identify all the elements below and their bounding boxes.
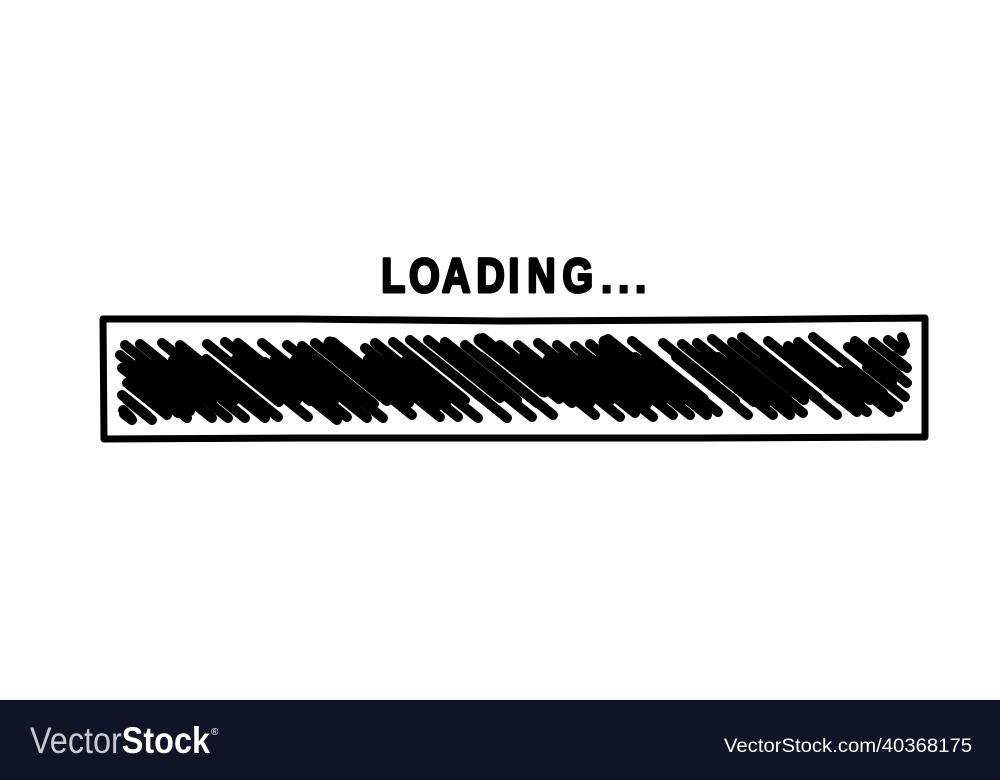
footer logo: VectorStock: VectorStock [30, 720, 210, 761]
footer registered mark: ® [211, 727, 219, 738]
progress bar fill: scribble [120, 337, 907, 420]
footer bar [0, 700, 1000, 780]
heading: loading: ... [599, 257, 648, 303]
heading: loading: LOADING [381, 249, 593, 303]
progress bar frame [103, 318, 925, 439]
footer image id: VectorStock.com/40368175 [724, 736, 972, 757]
